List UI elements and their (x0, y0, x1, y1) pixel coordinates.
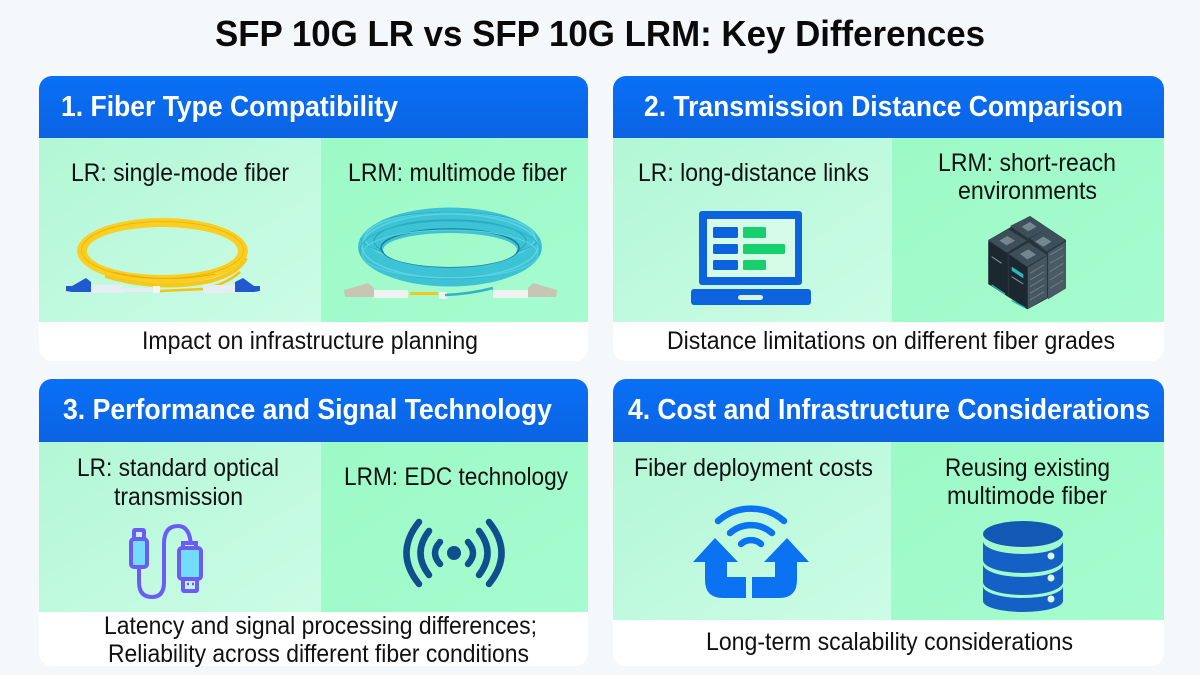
image: aqua multimode fiber cable (344, 200, 557, 299)
heading: fiber type compatibility: 1. Fiber Type Compatibility (61, 91, 398, 123)
icon: database (983, 521, 1063, 612)
icon: server racks (988, 216, 1066, 309)
heading: performance and signal technology: 3. Performance and Signal Technology (63, 394, 552, 426)
heading: transmission distance comparison: 2. Transmission Distance Comparison (644, 91, 1123, 123)
icon: usb cable (131, 526, 201, 597)
label: LRM short-reach environments (938, 149, 1116, 205)
label: LR standard optical transmission (77, 454, 279, 511)
caption: latency and reliability: Reliability across different fiber conditions (108, 640, 529, 668)
label: LRM short-reach environments: environments (958, 177, 1097, 205)
label: LRM multimode fiber: LRM: multimode fiber (348, 159, 567, 187)
label: LR single-mode fiber: LR: single-mode fiber (71, 159, 289, 187)
caption: distance limitations: Distance limitations on different fiber grades (667, 327, 1115, 355)
caption: impact on infrastructure planning: Impact on infrastructure planning (142, 327, 478, 355)
panel: transmission distance comparison (613, 76, 1164, 361)
caption: long-term scalability: Long-term scalability considerations (706, 628, 1073, 656)
panel: cost and infrastructure considerations (613, 379, 1164, 666)
label: reusing existing multimode fiber: multimode fiber (947, 482, 1107, 510)
image: yellow single-mode fiber cable (66, 218, 260, 293)
label: LR standard optical transmission: LR: standard optical (77, 454, 279, 482)
title: SFP 10G LR vs SFP 10G LRM: Key Differences (215, 13, 985, 54)
label: fiber deployment costs: Fiber deployment costs (634, 454, 873, 482)
panel: performance and signal technology (39, 379, 588, 668)
label: LR long-distance links: LR: long-distance links (638, 159, 869, 187)
label: LRM short-reach environments: LRM: short-reach (938, 149, 1116, 177)
caption: latency and reliability (104, 612, 537, 668)
icon: signal waves (406, 522, 502, 584)
icon: wifi with upward arrows (693, 509, 809, 598)
label: LR standard optical transmission: transmission (114, 483, 243, 511)
caption: latency and reliability: Latency and signal processing differences; (104, 612, 537, 640)
label: reusing existing multimode fiber: Reusing existing (945, 454, 1110, 482)
label: reusing existing multimode fiber (945, 454, 1110, 510)
heading: cost and infrastructure considerations: 4. Cost and Infrastructure Considerations (628, 394, 1150, 426)
panel: fiber type compatibility (39, 76, 588, 361)
icon: laptop (691, 211, 811, 305)
label: LRM EDC technology: LRM: EDC technology (344, 463, 568, 491)
